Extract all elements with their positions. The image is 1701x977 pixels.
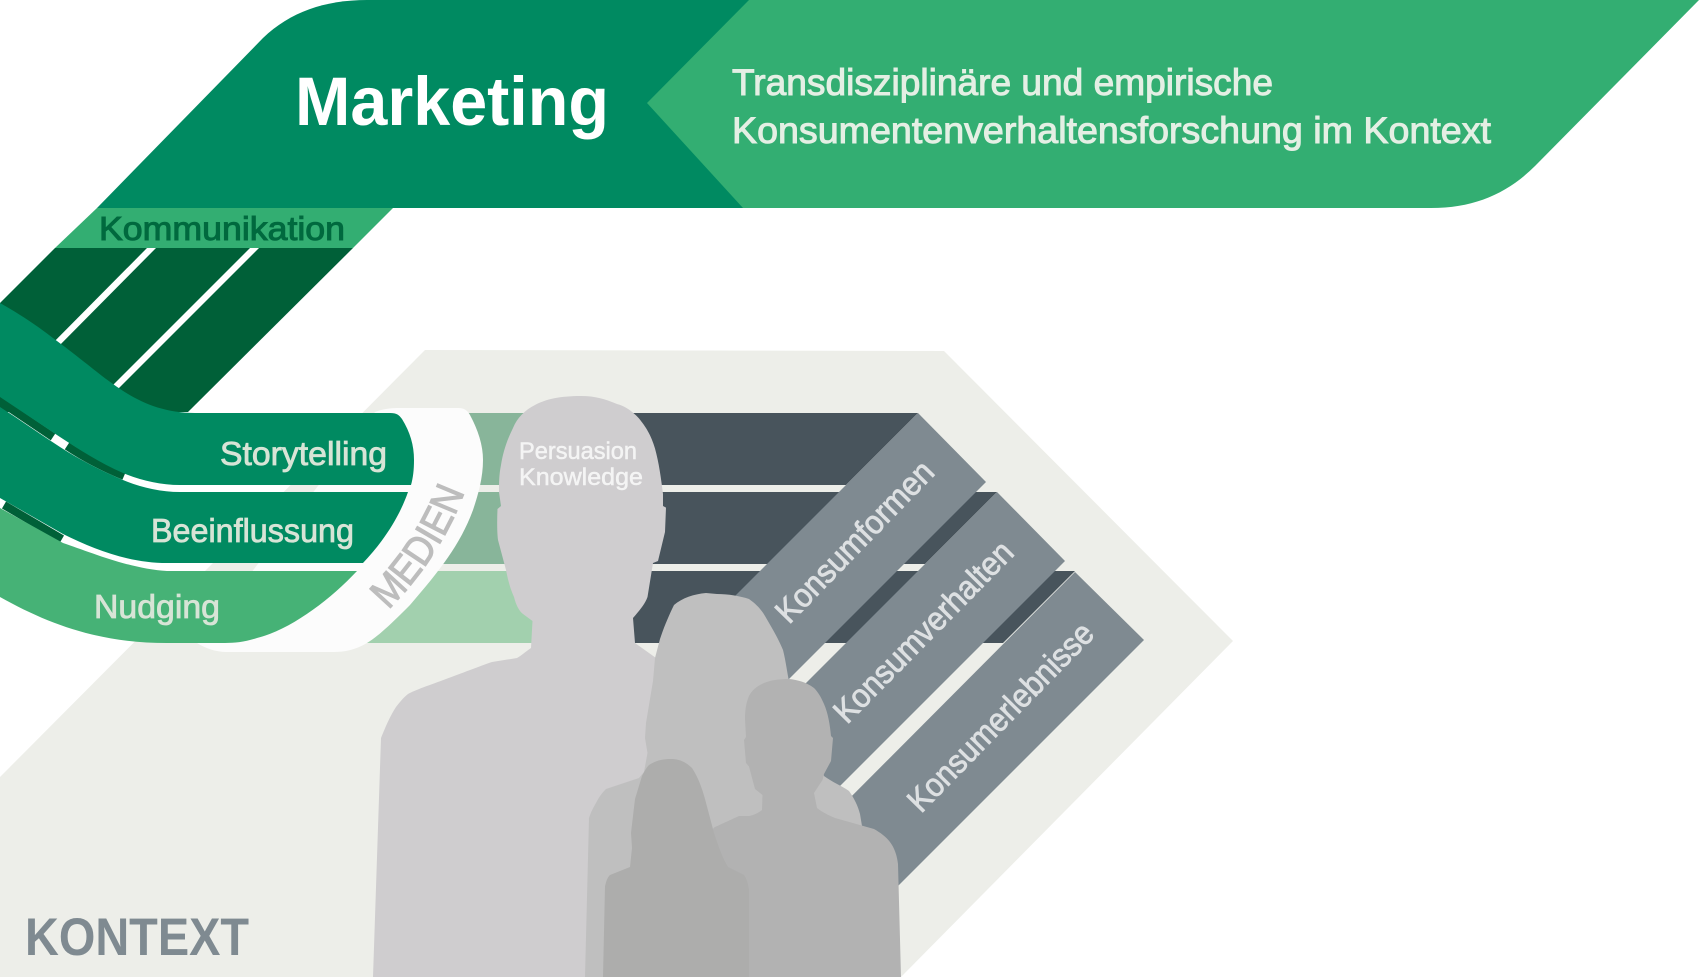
- band: Konsumverhalten: Konsumverhalten: [826, 533, 1021, 730]
- panel: header subtitle: Konsumentenverhaltensforschung im Kontext: [732, 110, 1492, 151]
- band: Storytelling: Storytelling: [220, 435, 387, 472]
- band: Beeinflussung: [0, 407, 408, 563]
- label: Persuasion Knowledge: Knowledge: [519, 464, 643, 491]
- silhouette: girl: [603, 759, 749, 977]
- silhouette: boy: [690, 679, 901, 977]
- label: Persuasion Knowledge: [519, 438, 643, 491]
- silhouette: woman: [585, 593, 862, 977]
- panel: Kommunikation label band: Kommunikation: [99, 210, 345, 247]
- label: KONTEXT: KONTEXT: [25, 908, 249, 967]
- band: MEDIEN arc: MEDIEN: [369, 483, 464, 608]
- panel: header subtitle: [647, 0, 1699, 208]
- panel: horizontal rows behind person: [350, 413, 1075, 643]
- band: Konsumerlebnisse: [812, 572, 1144, 904]
- band: Konsumformen: [692, 413, 986, 708]
- panel: Kommunikation label band: [55, 208, 393, 248]
- panel: header subtitle: Transdisziplinäre und empirische: [732, 62, 1273, 103]
- band: Nudging: [0, 508, 357, 643]
- strokes between influence bands: [4, 404, 124, 539]
- band: Beeinflussung: Beeinflussung: [151, 512, 354, 549]
- label: Persuasion Knowledge: Persuasion: [519, 438, 637, 465]
- panel: header Marketing: [97, 0, 750, 208]
- band: Konsumformen: Konsumformen: [767, 453, 941, 630]
- panel: diagonal consumer bands: [692, 413, 1144, 904]
- panel: Kommunikation dark stripes: [0, 248, 353, 412]
- band: Konsumverhalten: [757, 492, 1065, 801]
- band: Storytelling: [0, 303, 414, 485]
- panel: context background: [0, 350, 1233, 977]
- panel: header Marketing: Marketing: [295, 63, 609, 140]
- band: Konsumerlebnisse: Konsumerlebnisse: [900, 614, 1101, 819]
- band: Nudging: Nudging: [94, 588, 220, 625]
- silhouette: man with Persuasion Knowledge: [373, 396, 760, 977]
- band: MEDIEN arc: [198, 408, 483, 652]
